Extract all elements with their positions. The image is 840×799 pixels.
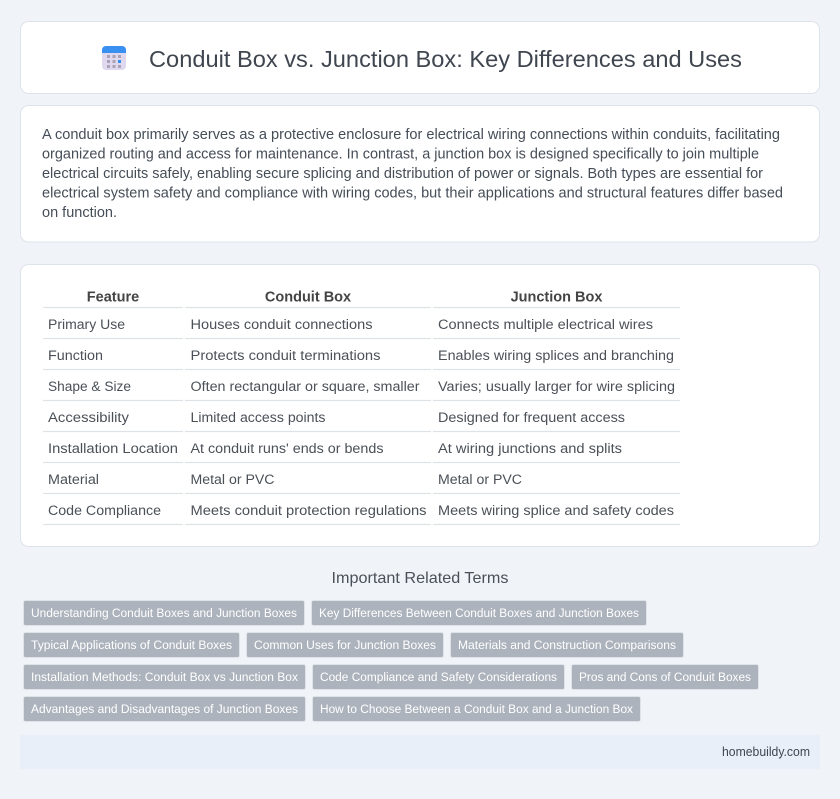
table row: shape and size: Shape & Size	[48, 379, 131, 395]
table row: code compliance: Meets conduit protection regulations	[190, 503, 426, 519]
table row: accessibility: Designed for frequent access	[438, 410, 625, 426]
table row: material	[48, 472, 522, 488]
tag	[450, 632, 684, 658]
tag: Typical Applications of Conduit Boxes	[31, 638, 232, 652]
tag	[572, 664, 758, 690]
footer	[20, 735, 820, 769]
table row: accessibility: Limited access points	[190, 410, 326, 426]
table row: function: Enables wiring splices and branching	[438, 348, 674, 364]
table row: primary use: Primary Use	[48, 317, 125, 333]
tag list: related terms	[24, 600, 758, 722]
table row: function: Protects conduit terminations	[190, 348, 380, 364]
table row: material: Metal or PVC	[190, 472, 274, 488]
title: Conduit Box vs. Junction Box: Key Differences and Uses	[149, 46, 742, 72]
table row: installation location: At wiring junctions and splits	[438, 441, 622, 457]
tag: Common Uses for Junction Boxes	[254, 638, 436, 652]
table row: accessibility: Accessibility	[48, 410, 130, 426]
table row: primary use	[48, 317, 653, 333]
tag: Understanding Conduit Boxes and Junction Boxes	[31, 606, 297, 620]
text block: intro: electrical circuits safely, enabling secure splicing and distribution of power or signals. Both types are essential for	[42, 166, 763, 182]
table row: material: Material	[48, 472, 99, 488]
tag: Pros and Cons of Conduit Boxes	[579, 670, 751, 684]
table row: installation location: Installation Location	[48, 441, 178, 457]
table header: Junction Box	[511, 290, 602, 306]
tag	[312, 696, 640, 722]
tag	[312, 600, 646, 626]
text block: intro: organized routing and access for maintenance. In contrast, a junction box is designed specifically to join multiple	[42, 146, 759, 162]
table row: accessibility	[48, 410, 625, 426]
table header: Conduit Box	[265, 290, 351, 306]
tag: Materials and Construction Comparisons	[458, 638, 676, 652]
table row: code compliance: Meets wiring splice and safety codes	[438, 503, 674, 519]
table row: function	[48, 348, 674, 364]
panel: header	[20, 22, 820, 94]
table row: shape and size: Varies; usually larger for wire splicing	[438, 379, 675, 395]
tag	[24, 632, 240, 658]
tag: Advantages and Disadvantages of Junction Boxes	[31, 702, 298, 716]
table row: primary use: Houses conduit connections	[190, 317, 372, 333]
text block: intro: on function.	[42, 205, 117, 221]
panel: comparison table	[20, 264, 820, 546]
table row: primary use: Connects multiple electrical wires	[438, 317, 653, 333]
tag: Key Differences Between Conduit Boxes and Junction Boxes	[319, 606, 639, 620]
tag: Installation Methods: Conduit Box vs Junction Box	[31, 670, 299, 684]
text block: intro: A conduit box primarily serves as a protective enclosure for electrical wiring connections within conduits, facilitating	[42, 127, 780, 143]
tag	[246, 632, 444, 658]
table row: shape and size: Often rectangular or square, smaller	[190, 379, 420, 395]
text block: intro	[42, 127, 783, 221]
text block: intro: electrical system safety and compliance with wiring codes, but their applications and structural features differ based	[42, 186, 783, 202]
table row: installation location: At conduit runs' ends or bends	[190, 441, 384, 457]
tag	[24, 696, 306, 722]
tag	[24, 600, 304, 626]
panel: intro paragraph	[20, 106, 820, 242]
table row: material: Metal or PVC	[438, 472, 522, 488]
tag	[24, 664, 306, 690]
table row: code compliance	[48, 503, 674, 519]
tag: Code Compliance and Safety Considerations	[320, 670, 557, 684]
heading: related terms: Important Related Terms	[332, 570, 508, 587]
icon: calendar	[102, 46, 126, 70]
tag	[312, 664, 564, 690]
table row: function: Function	[48, 348, 103, 364]
footer text: site name: homebuildy.com	[722, 745, 810, 759]
table row: installation location	[48, 441, 622, 457]
table row: code compliance: Code Compliance	[48, 503, 161, 519]
table header	[87, 290, 602, 306]
tag: How to Choose Between a Conduit Box and a Junction Box	[320, 702, 634, 716]
table header: Feature	[87, 290, 139, 306]
table row: shape and size	[48, 379, 675, 395]
